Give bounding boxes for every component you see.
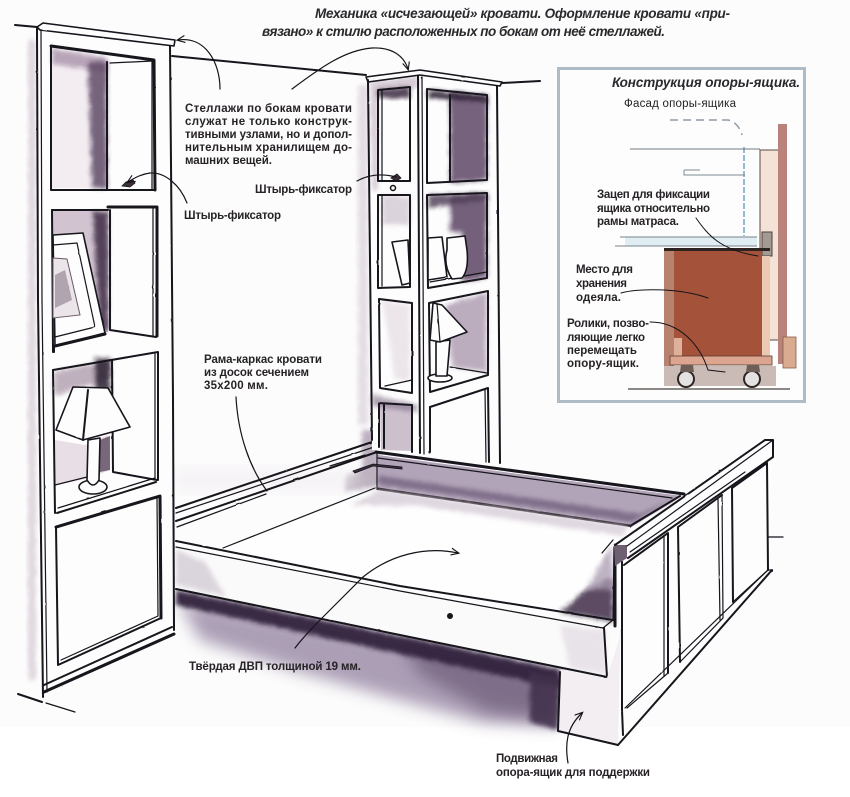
shelf cell 3	[53, 346, 158, 513]
icon: framed picture	[53, 233, 105, 346]
label: casters: Ролики, позво-	[567, 318, 649, 330]
text: shelves note: машних вещей.	[185, 155, 272, 167]
inset subheading: Фасад опоры-ящика	[624, 98, 737, 110]
inset heading: Конструкция опоры-ящика.	[612, 75, 800, 90]
left shelf frame	[18, 23, 175, 712]
heading	[262, 6, 730, 39]
text: frame note: из досок сечением	[204, 367, 309, 379]
arrow: shelves to right cornice	[292, 48, 408, 89]
shelf cell 1	[51, 46, 155, 190]
text: frame note: 35x200 мм.	[204, 380, 268, 392]
arrow: footboard tick	[602, 540, 613, 553]
inset: storage box	[664, 248, 776, 386]
wall lines	[15, 25, 540, 83]
icon: table lamp	[56, 387, 130, 494]
footboard panel 3	[732, 463, 768, 602]
text: frame note	[204, 354, 322, 392]
right shelf cell shading	[370, 76, 488, 451]
left shelf cell shading	[52, 48, 110, 485]
right shelf right column cells	[427, 89, 489, 462]
right shelf frame	[366, 70, 502, 463]
label: casters: опору-ящик.	[567, 358, 639, 370]
icon: jug	[446, 236, 467, 279]
front board	[176, 541, 615, 677]
label: fibreboard: Твёрдая ДВП толщиной 19 мм.	[189, 661, 361, 673]
shelf cell 4	[56, 496, 161, 665]
icon: retaining pin	[122, 180, 135, 187]
label: hook: рамы матраса.	[597, 216, 679, 228]
icon: right table lamp	[428, 303, 467, 382]
text: shelves note: нительным хранилищем до-	[185, 142, 352, 154]
label: casters: ляющие легко	[567, 332, 645, 344]
arrow: movable support leader	[567, 713, 582, 763]
label: casters	[567, 318, 649, 370]
label: right pin: Штырь-фиксатор	[255, 184, 352, 196]
heading: Механика «исчезающей» кровати. Оформление кровати «при-	[315, 6, 730, 21]
right shelving unit	[366, 70, 502, 463]
arrow: right pin	[357, 175, 396, 181]
footboard	[613, 440, 783, 745]
text: shelves note	[185, 103, 352, 167]
label: movable support: Подвижная	[496, 753, 558, 765]
label: casters: перемещать	[567, 345, 637, 357]
arrow: shelves to left cornice	[178, 40, 220, 89]
mattress surface	[223, 488, 630, 622]
label: hook: ящика относительно	[597, 203, 710, 215]
heading: вязано» к стилю расположенных по бокам от неё стеллажей.	[262, 24, 665, 39]
icon: small picture frames	[392, 237, 447, 285]
shelf cell 2	[52, 207, 157, 352]
label: blanket storage: хранения	[576, 278, 627, 290]
arrow: fibreboard leader	[295, 551, 458, 648]
inset: wall section	[760, 124, 796, 368]
panel: support box construction	[558, 68, 804, 402]
label: blanket storage	[576, 264, 633, 304]
arrow: left pin	[128, 173, 187, 203]
text: shelves note: Стеллажи по бокам кровати	[185, 103, 352, 115]
label: blanket storage: Место для	[576, 264, 633, 276]
label: movable support	[496, 753, 650, 779]
icon: casters	[678, 365, 760, 387]
label: hook	[597, 189, 710, 228]
icon: peg dot on front board	[447, 613, 453, 619]
support box	[558, 630, 622, 745]
icon: right retaining pin	[390, 174, 401, 190]
text: frame note: Рама-каркас кровати	[204, 354, 322, 366]
label: left pin: Штырь-фиксатор	[184, 210, 281, 222]
wall shading	[28, 40, 380, 680]
inset: facade dashed outline	[615, 120, 760, 246]
arrow: frame leader	[236, 397, 267, 491]
side rail	[176, 442, 402, 527]
bed: mattress and bed frame	[176, 440, 783, 745]
label: movable support: опора-ящик для поддержки	[496, 767, 650, 779]
left shelving unit	[18, 23, 175, 712]
text: shelves note: служат не только конструк-	[185, 116, 352, 128]
right shelf left column cells	[378, 87, 412, 452]
bed back board	[376, 452, 684, 528]
text: shelves note: тивными узлами, но и допол-	[185, 129, 352, 141]
label: hook: Зацеп для фиксации	[597, 189, 710, 201]
inset leaders	[621, 218, 758, 372]
footboard panel 1	[624, 533, 668, 708]
footboard panel 2	[678, 495, 723, 662]
label: blanket storage: одеяла.	[576, 292, 621, 304]
floor shadow under bed	[176, 590, 560, 730]
